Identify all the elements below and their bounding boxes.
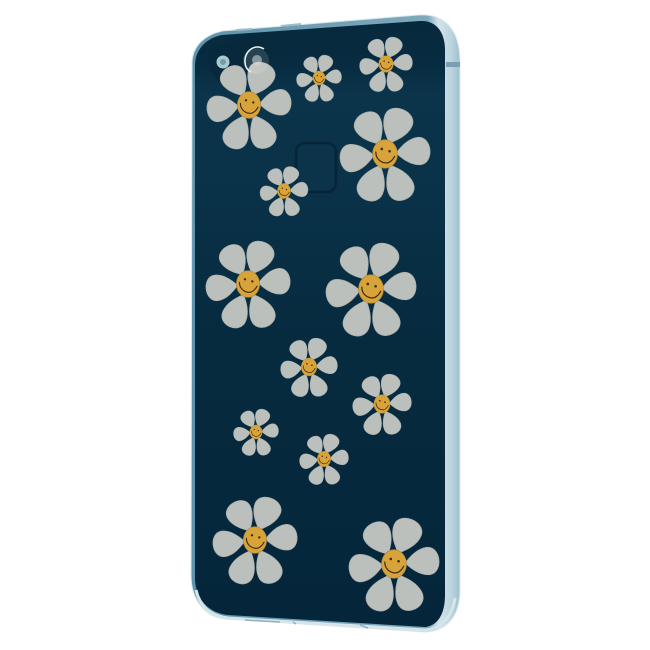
flower 3 bbox=[359, 35, 413, 94]
flower 10 bbox=[233, 407, 279, 457]
flower 12 bbox=[211, 493, 298, 588]
flower 2 bbox=[296, 53, 342, 103]
flower 9 bbox=[352, 371, 412, 437]
daisy flowers bbox=[204, 35, 440, 615]
top edge buttons bbox=[236, 24, 301, 30]
phone back panel bbox=[195, 21, 445, 627]
flower 5 bbox=[259, 164, 309, 218]
flower 8 bbox=[280, 336, 338, 399]
bottom clear rim highlight bbox=[196, 590, 455, 630]
clear case outer shell bbox=[191, 15, 460, 632]
flower 7 bbox=[324, 239, 417, 340]
camera module bbox=[209, 41, 273, 82]
flower 11 bbox=[299, 432, 349, 487]
flower 6 bbox=[204, 237, 291, 332]
bottom edge details bbox=[245, 620, 368, 628]
flower 13 bbox=[347, 514, 440, 615]
icon: camera lens bbox=[243, 47, 269, 74]
fingerprint sensor bbox=[296, 143, 336, 192]
flower 1 bbox=[205, 58, 292, 153]
side button bbox=[446, 62, 460, 67]
flower 4 bbox=[338, 104, 431, 205]
icon: camera flash bbox=[216, 56, 230, 68]
